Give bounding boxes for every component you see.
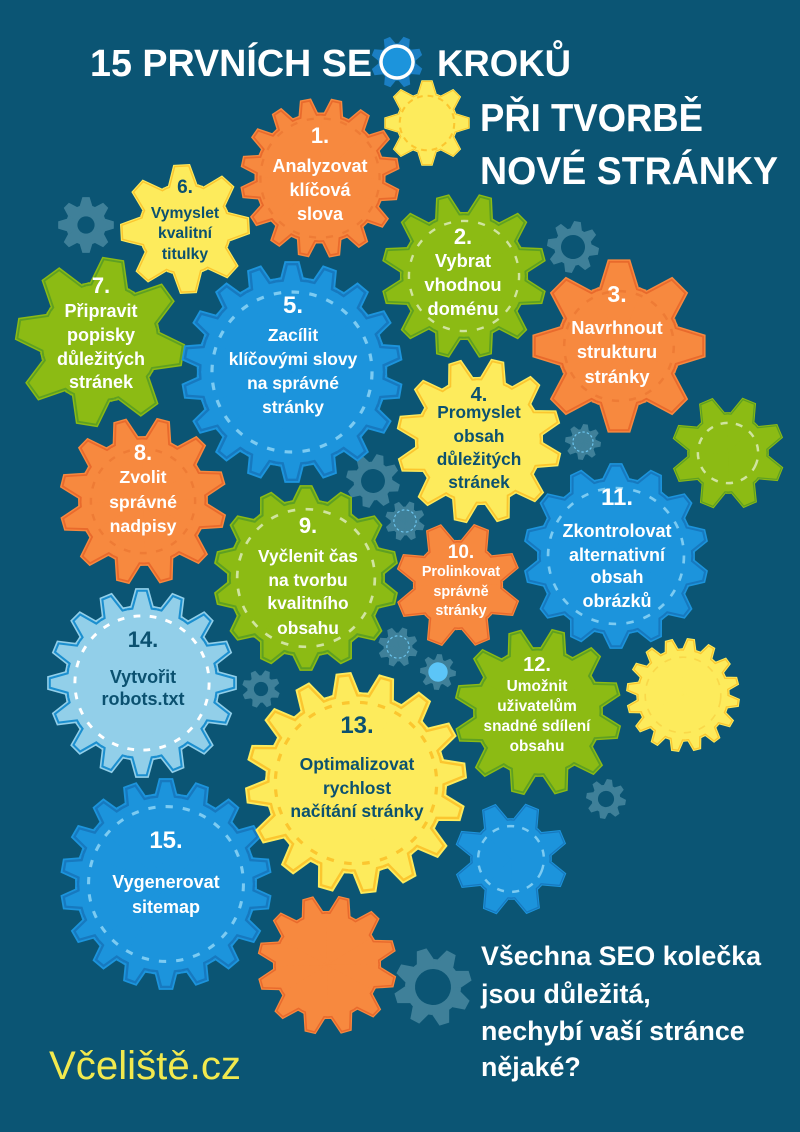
step text: 5. [283, 292, 303, 319]
step text: 10. [448, 542, 474, 563]
step text: 11. [601, 484, 633, 511]
step text: kvalitního [267, 593, 349, 613]
step text: na tvorbu [268, 570, 348, 590]
icon: grey gear by step 14 [238, 666, 284, 712]
step text: 9. [299, 513, 317, 538]
step text: Vybrat [435, 250, 491, 271]
step text: nadpisy [110, 516, 177, 536]
logo text: Včeliště.cz [49, 1044, 241, 1088]
closing question text: jsou důležitá, [480, 979, 651, 1009]
step text: obsahu [510, 738, 564, 755]
icon: grey gear by step 9 [341, 449, 405, 513]
title line 1: 15 PRVNÍCH SE [90, 41, 372, 85]
icon: grey gear by step 2 [544, 218, 602, 276]
gear shape [440, 614, 636, 810]
gear shape [380, 507, 536, 663]
step text: vhodnou [424, 274, 502, 295]
gear step 3 [536, 263, 702, 429]
gear step 13 [224, 651, 488, 915]
step text: strukturu [577, 341, 657, 362]
step text: 12. [523, 654, 551, 676]
step text: stránky [262, 397, 324, 417]
closing question text: nechybí vaší stránce [481, 1016, 745, 1046]
step text: správné [109, 492, 177, 512]
step text: rychlost [323, 778, 391, 798]
step text: na správné [247, 373, 339, 393]
step text: 3. [607, 281, 627, 307]
step text: Promyslet [437, 402, 521, 422]
icon: grey dashed gear [381, 497, 429, 545]
icon: small grey gear left [59, 198, 113, 252]
gear step 5 [184, 265, 400, 479]
decorative orange gear [246, 884, 408, 1046]
step text: správně [433, 584, 489, 600]
step text: stránky [584, 366, 650, 387]
gear shape [63, 782, 269, 986]
gear step 8 [45, 403, 241, 599]
step text: 1. [311, 123, 329, 148]
step text: slova [297, 204, 344, 224]
decorative green gear right [657, 382, 799, 524]
step text: robots.txt [102, 689, 185, 709]
gear step 15 [63, 782, 269, 986]
gear step 2 [366, 178, 562, 374]
gear step 14 [51, 592, 233, 774]
gear shape [525, 467, 707, 645]
step text: Vyčlenit čas [258, 546, 358, 566]
icon: blue gear replacing letter O in the title [365, 30, 429, 94]
closing question text: Všechna SEO kolečka [481, 941, 762, 971]
step text: Optimalizovat [300, 754, 415, 774]
step text: důležitých [57, 349, 145, 369]
step text: Umožnit [507, 678, 567, 695]
step text: 7. [92, 273, 110, 298]
step text: sitemap [132, 897, 200, 917]
step text: Analyzovat [272, 156, 368, 176]
step text: titulky [162, 246, 208, 263]
decorative blue gear [440, 788, 582, 930]
step text: stránek [69, 372, 134, 392]
step text: doménu [427, 298, 499, 319]
step text: 6. [177, 177, 193, 198]
gear shape [7, 249, 193, 435]
gear step 7 [7, 249, 193, 435]
decorative yellow gear right [621, 633, 745, 757]
gear shape [45, 403, 241, 599]
gear step 6 [120, 164, 250, 294]
step text: Zacílit [268, 325, 318, 345]
step text: 4. [471, 384, 487, 406]
step text: 2. [454, 224, 472, 249]
gear shape [229, 87, 411, 269]
icon: grey gear with light blue centre [419, 653, 457, 691]
icon: grey gear by step 12 [584, 777, 628, 821]
step text: Prolinkovat [422, 564, 500, 580]
step text: alternativní [569, 545, 666, 565]
closing question text: nějaké? [481, 1052, 581, 1082]
step text: důležitých [437, 449, 521, 469]
gear shape [184, 265, 400, 479]
step text: obrázků [582, 591, 652, 611]
gear shape [536, 263, 702, 429]
title line 3: NOVÉ STRÁNKY [480, 149, 778, 193]
gear step 9 [215, 489, 397, 667]
step text: Vygenerovat [112, 872, 220, 892]
gear step 4 [383, 345, 575, 537]
step text: 8. [134, 440, 152, 465]
gear shape [120, 164, 250, 294]
step text: snadné sdílení [484, 718, 591, 735]
gear shape [224, 651, 488, 915]
title word KROKŮ: KROKŮ [437, 39, 571, 84]
decorative yellow gear top [386, 82, 468, 164]
gear step 11 [525, 467, 707, 645]
step text: Zvolit [119, 467, 167, 487]
step text: stránky [435, 603, 487, 619]
gear shape [366, 178, 562, 374]
step text: načítání stránky [290, 801, 424, 821]
step text: obsah [454, 426, 504, 446]
step text: obsahu [277, 618, 339, 638]
step text: klíčovými slovy [229, 349, 358, 369]
gear step 10 [380, 507, 536, 663]
step text: klíčová [289, 180, 352, 200]
gear step 12 [440, 614, 636, 810]
step text: 14. [128, 627, 158, 652]
step text: uživatelům [497, 698, 577, 715]
gear shape [51, 592, 233, 774]
icon: grey dashed gear by step 3 [564, 423, 602, 461]
step text: popisky [67, 325, 135, 345]
step text: 15. [149, 827, 183, 854]
icon: large grey gear bottom [383, 937, 483, 1037]
title [90, 39, 778, 193]
step text: 13. [340, 712, 374, 739]
step text: Navrhnout [571, 317, 663, 338]
step text: Vytvořit [110, 667, 176, 687]
step text: Připravit [64, 301, 138, 321]
gear shape [383, 345, 575, 537]
icon: grey dashed gear lower [374, 623, 422, 671]
step text: stránek [448, 472, 510, 492]
step text: kvalitní [158, 225, 213, 242]
step text: Vymyslet [151, 205, 220, 222]
gear shape [215, 489, 397, 667]
title line 2: PŘI TVORBĚ [480, 96, 703, 140]
step text: Zkontrolovat [562, 521, 672, 541]
step text: obsah [590, 567, 644, 587]
gear step 1 [229, 87, 411, 269]
